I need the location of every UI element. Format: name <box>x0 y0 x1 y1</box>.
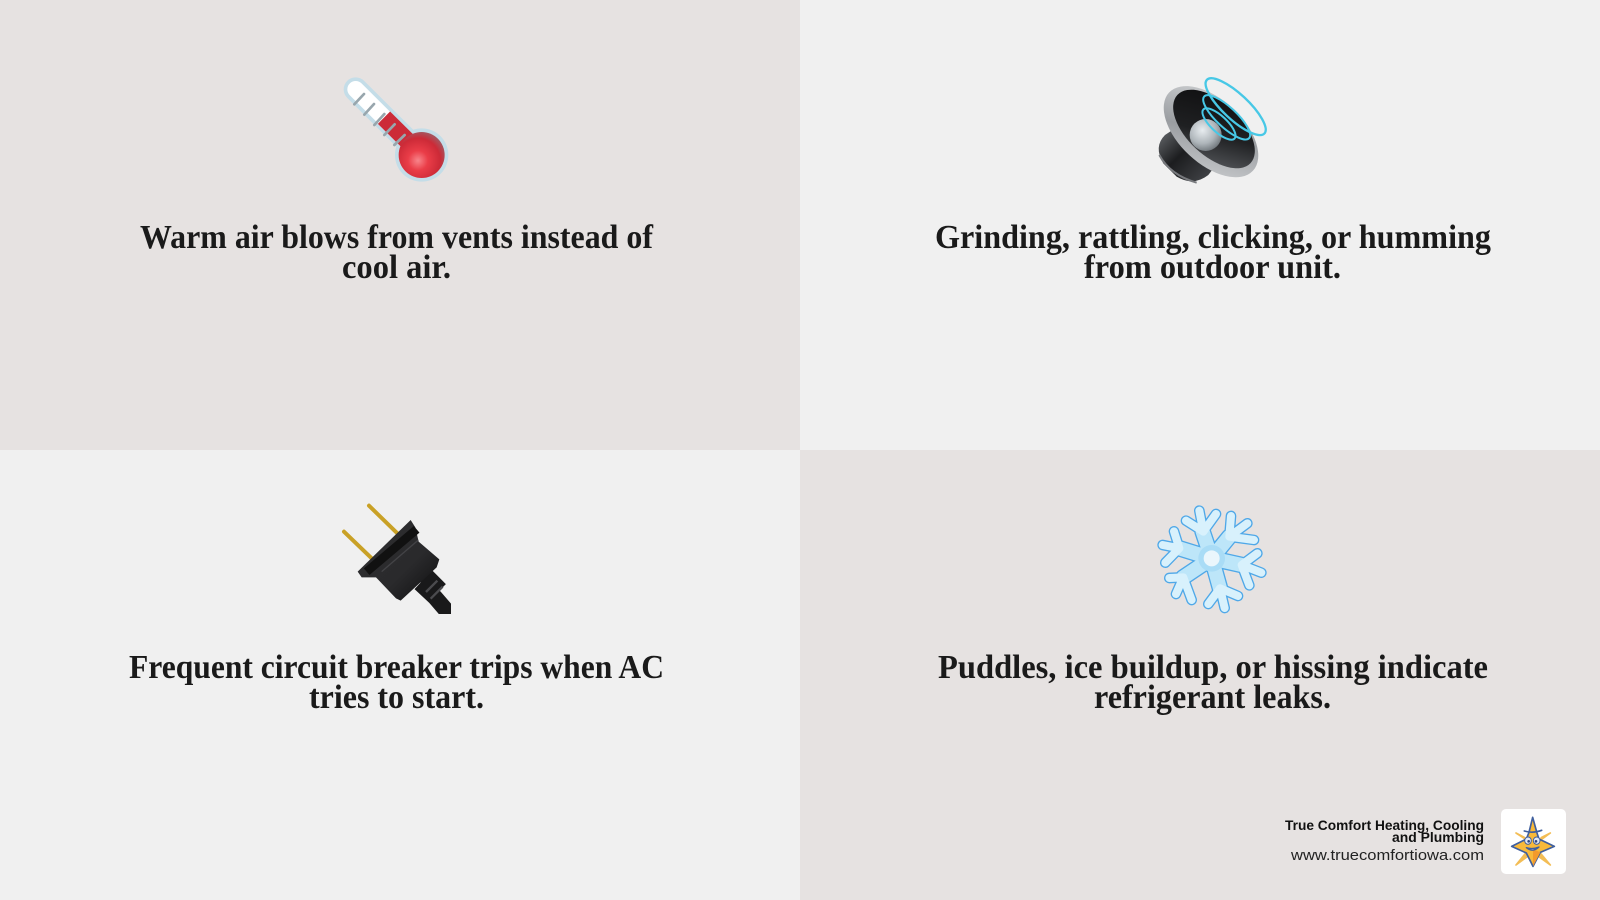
panel: warm air <box>0 0 800 450</box>
company name: and Plumbing <box>1392 830 1484 845</box>
heading: warm air <box>140 219 654 286</box>
heading: breaker trips: tries to start. <box>309 679 484 716</box>
logo card <box>1501 809 1566 874</box>
heading: warm air: Warm air blows from vents instead of <box>140 219 654 256</box>
company name <box>1285 818 1484 845</box>
icon: thermometer <box>354 89 448 182</box>
icon: plug <box>344 506 452 617</box>
panel: breaker trips <box>130 504 662 708</box>
heading: noise <box>935 219 1491 286</box>
icon: snowflake <box>1163 511 1261 608</box>
website: www.truecomfortiowa.com <box>1290 847 1484 864</box>
heading: breaker trips: Frequent circuit breaker trips when AC <box>129 649 664 686</box>
icon: speaker <box>1147 69 1275 194</box>
heading: warm air: cool air. <box>342 249 451 286</box>
heading: noise: Grinding, rattling, clicking, or humming <box>935 219 1491 256</box>
heading: refrigerant leaks: refrigerant leaks. <box>1094 679 1331 716</box>
heading: breaker trips <box>129 649 664 716</box>
panel: refrigerant leaks <box>800 450 1600 900</box>
icon: star mascot <box>1512 817 1554 866</box>
company name: True Comfort Heating, Cooling <box>1285 818 1484 833</box>
panel: noise <box>800 0 1600 450</box>
heading: refrigerant leaks: Puddles, ice buildup, or hissing indicate <box>938 649 1488 686</box>
heading: refrigerant leaks <box>938 649 1488 716</box>
heading: noise: from outdoor unit. <box>1084 249 1341 286</box>
